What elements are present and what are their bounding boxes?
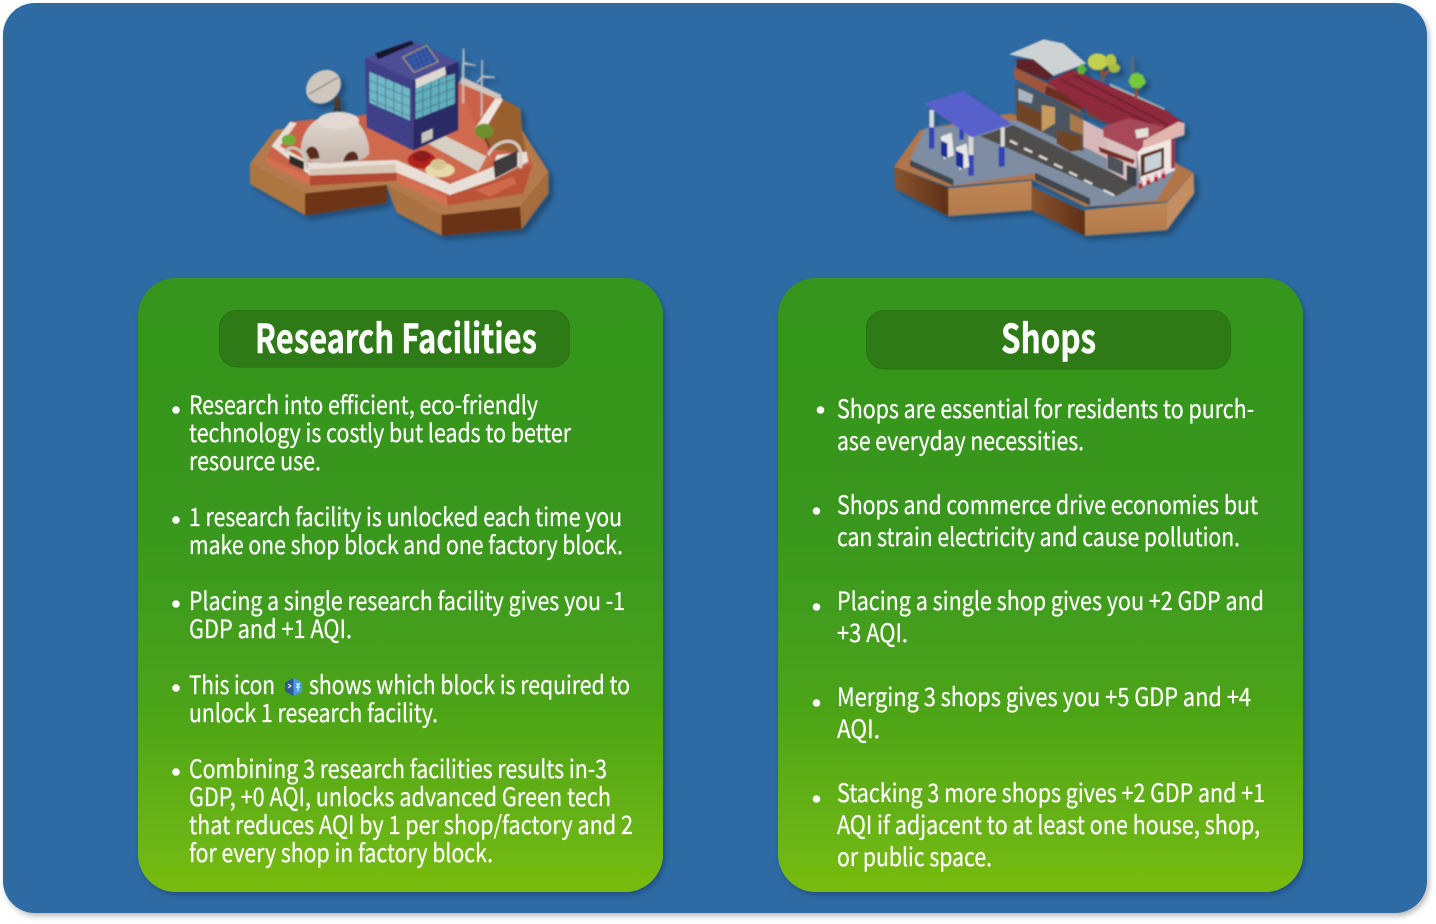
red roof bbox=[1047, 69, 1185, 152]
grey roof bbox=[1009, 39, 1086, 81]
heading: shops bbox=[866, 307, 1230, 369]
trees and gates bbox=[282, 124, 521, 178]
bullet: merging shops: Merging 3 shops gives you +5 GDP and +4 bbox=[837, 678, 1251, 714]
bullet: merging shops: AQI. bbox=[837, 710, 880, 746]
bullet: stacking shops bbox=[813, 774, 1265, 874]
bullet: required block icon: unlock 1 research facility. bbox=[189, 694, 438, 730]
bullet: commerce: Shops and commerce drive economies but bbox=[837, 486, 1258, 522]
road bbox=[980, 125, 1137, 196]
wind turbines bbox=[462, 48, 495, 117]
bullet: merging shops bbox=[813, 678, 1251, 746]
panel: research facilities bbox=[138, 278, 663, 892]
bullet: unlocking: make one shop block and one factory block. bbox=[189, 526, 623, 562]
bullet: combining facilities bbox=[172, 750, 633, 870]
bullet: shop necessities bbox=[817, 390, 1254, 458]
bullet: shop necessities: ase everyday necessities. bbox=[837, 422, 1084, 458]
bullet: unlocking bbox=[172, 498, 623, 562]
bullet: placing a shop: Placing a single shop gives you +2 GDP and bbox=[837, 582, 1264, 618]
radar dish bbox=[299, 63, 347, 119]
office building bbox=[365, 40, 458, 151]
bullet: unlocking: 1 research facility is unlocked each time you bbox=[189, 498, 622, 534]
white perimeter wall bbox=[272, 77, 528, 195]
island base bbox=[894, 113, 1194, 236]
bullet: required block icon bbox=[172, 666, 630, 730]
bullet: stacking shops: Stacking 3 more shops gives +2 GDP and +1 bbox=[837, 774, 1265, 810]
bullet: combining facilities: that reduces AQI by 1 per shop/factory and 2 bbox=[189, 806, 633, 842]
shop row bbox=[1014, 67, 1175, 187]
bullet: commerce bbox=[813, 486, 1258, 554]
bullet: placing a research facility: Placing a single research facility gives you -1 bbox=[189, 582, 625, 618]
bullet: research benefit bbox=[172, 386, 571, 478]
gas station bbox=[924, 91, 1012, 176]
bullet: placing a research facility bbox=[172, 582, 625, 646]
bullet: research benefit: technology is costly but leads to better bbox=[189, 414, 571, 450]
illustration: shops island bbox=[894, 39, 1194, 236]
pavement bbox=[422, 135, 487, 172]
toy cars bbox=[408, 150, 455, 177]
bullet: stacking shops: AQI if adjacent to at least one house, shop, bbox=[837, 806, 1260, 842]
concrete lot bbox=[910, 120, 1177, 206]
bullet: required block icon: shows which block is required to bbox=[309, 666, 630, 702]
panel: shops bbox=[778, 278, 1303, 892]
dome bbox=[301, 112, 369, 163]
heading: research facilities: Research Facilities bbox=[255, 307, 537, 365]
bullet: research benefit: Research into efficient, eco-friendly bbox=[189, 386, 538, 422]
trees bbox=[1077, 53, 1163, 188]
bullet: combining facilities: GDP, +0 AQI, unlocks advanced Green tech bbox=[189, 778, 611, 814]
bullet: commerce: can strain electricity and cause pollution. bbox=[837, 518, 1240, 554]
bullet: combining facilities: Combining 3 research facilities results in-3 bbox=[189, 750, 607, 786]
icon: research block bbox=[285, 678, 302, 696]
bullet: placing a research facility: GDP and +1 AQI. bbox=[189, 610, 352, 646]
bullet: stacking shops: or public space. bbox=[837, 838, 992, 874]
bullet: required block icon: This icon bbox=[189, 666, 275, 702]
island base bbox=[250, 87, 548, 236]
bullet: shop necessities: Shops are essential for residents to purch- bbox=[837, 390, 1254, 426]
illustration: research facility island bbox=[250, 40, 548, 236]
bullet: placing a shop bbox=[813, 582, 1264, 650]
bullet: combining facilities: for every shop in factory block. bbox=[189, 834, 493, 870]
heading: shops: Shops bbox=[1001, 307, 1096, 365]
bullet: placing a shop: +3 AQI. bbox=[837, 614, 908, 650]
bullet: research benefit: resource use. bbox=[189, 442, 321, 478]
red terrace bbox=[267, 82, 533, 205]
